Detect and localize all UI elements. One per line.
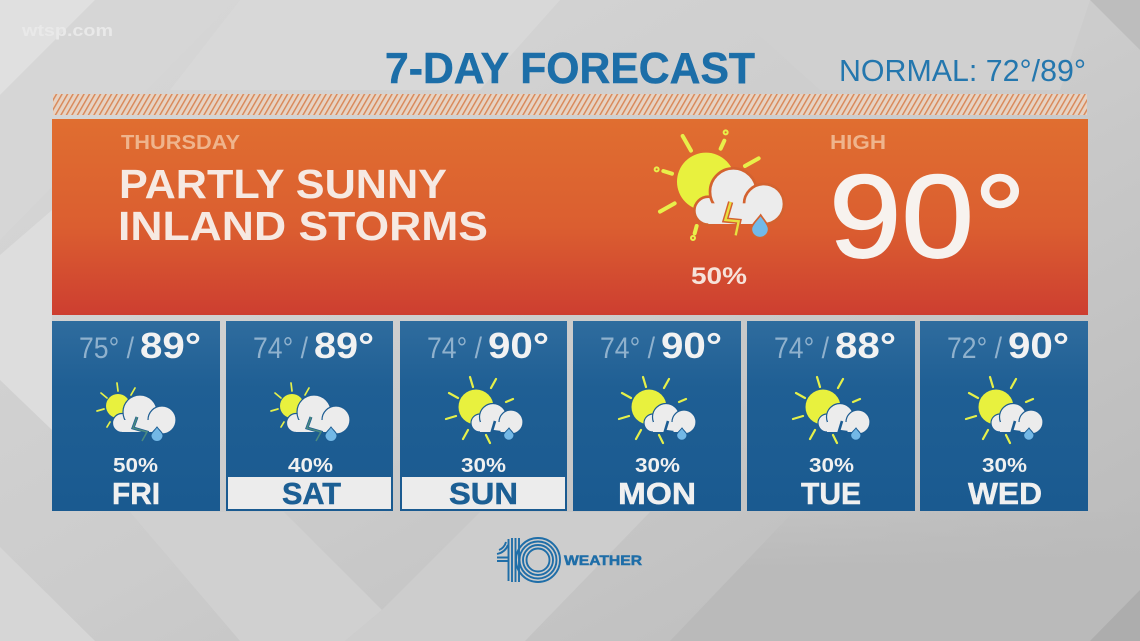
- temperatures: 89°: [314, 325, 374, 366]
- precipitation: 30%: [635, 455, 680, 477]
- icon: storm: [97, 383, 176, 442]
- icon: partly sunny storm: [966, 377, 1043, 443]
- temperatures: 88°: [835, 325, 896, 366]
- temperatures: [427, 325, 549, 366]
- card: Sunday: [400, 321, 567, 511]
- temperatures: [253, 325, 374, 366]
- day: WED: [968, 476, 1042, 511]
- temperatures: 74° /: [774, 332, 830, 365]
- temperatures: 74° /: [253, 332, 309, 365]
- day box: [402, 477, 565, 509]
- logo numeral 10: [497, 538, 560, 582]
- panel: today Thursday: [52, 119, 1088, 315]
- temperatures: 75° /: [79, 332, 135, 365]
- temperatures: [947, 325, 1069, 366]
- day box: [228, 477, 391, 509]
- temperatures: 74° /: [427, 332, 483, 365]
- icon: partly sunny storm: [619, 377, 696, 443]
- watermark: wtsp.com: wtsp.com: [21, 21, 113, 40]
- temperatures: 90°: [1008, 325, 1069, 366]
- precipitation: 30%: [461, 455, 506, 477]
- card: Wednesday: [920, 321, 1088, 511]
- headline: [118, 161, 488, 249]
- temperatures: 74° /: [600, 332, 656, 365]
- icon: storm: [271, 383, 350, 442]
- day: TUE: [801, 476, 861, 511]
- card: Tuesday: [747, 321, 915, 511]
- day label: THURSDAY: [121, 132, 241, 154]
- headline: INLAND STORMS: [118, 203, 488, 249]
- icon: partly sunny storm: [446, 377, 523, 443]
- precipitation chance: 50%: [691, 263, 747, 290]
- day: MON: [618, 476, 696, 511]
- headline: PARTLY SUNNY: [119, 161, 447, 207]
- precipitation: 30%: [809, 455, 854, 477]
- day: SAT: [282, 476, 341, 511]
- temperatures: 90°: [661, 325, 722, 366]
- hatched stripe: [53, 94, 1087, 115]
- temperatures: 89°: [140, 325, 201, 366]
- temperatures: [774, 325, 896, 366]
- precipitation: 50%: [113, 455, 158, 477]
- logo: 10 Weather: [497, 538, 642, 582]
- temperatures: 72° /: [947, 332, 1003, 365]
- precipitation: 30%: [982, 455, 1027, 477]
- temperatures: 90°: [488, 325, 549, 366]
- icon: partly sunny storm: [793, 377, 870, 443]
- precipitation: 40%: [288, 455, 333, 477]
- day: SUN: [449, 476, 518, 511]
- card: Monday: [573, 321, 741, 511]
- high label: HIGH: [830, 132, 886, 154]
- high temperature: 90°: [829, 151, 1026, 283]
- title: 7-DAY FORECAST: [385, 44, 755, 93]
- logo wordmark: WEATHER: [564, 552, 642, 568]
- card: Friday: [52, 321, 220, 511]
- day: FRI: [112, 476, 160, 511]
- icon: sun, cloud, lightning and rain: [656, 131, 784, 239]
- temperatures: [600, 325, 722, 366]
- normal temperatures: NORMAL: 72°/89°: [839, 53, 1086, 88]
- temperatures: [79, 325, 201, 366]
- card: Saturday: [226, 321, 393, 511]
